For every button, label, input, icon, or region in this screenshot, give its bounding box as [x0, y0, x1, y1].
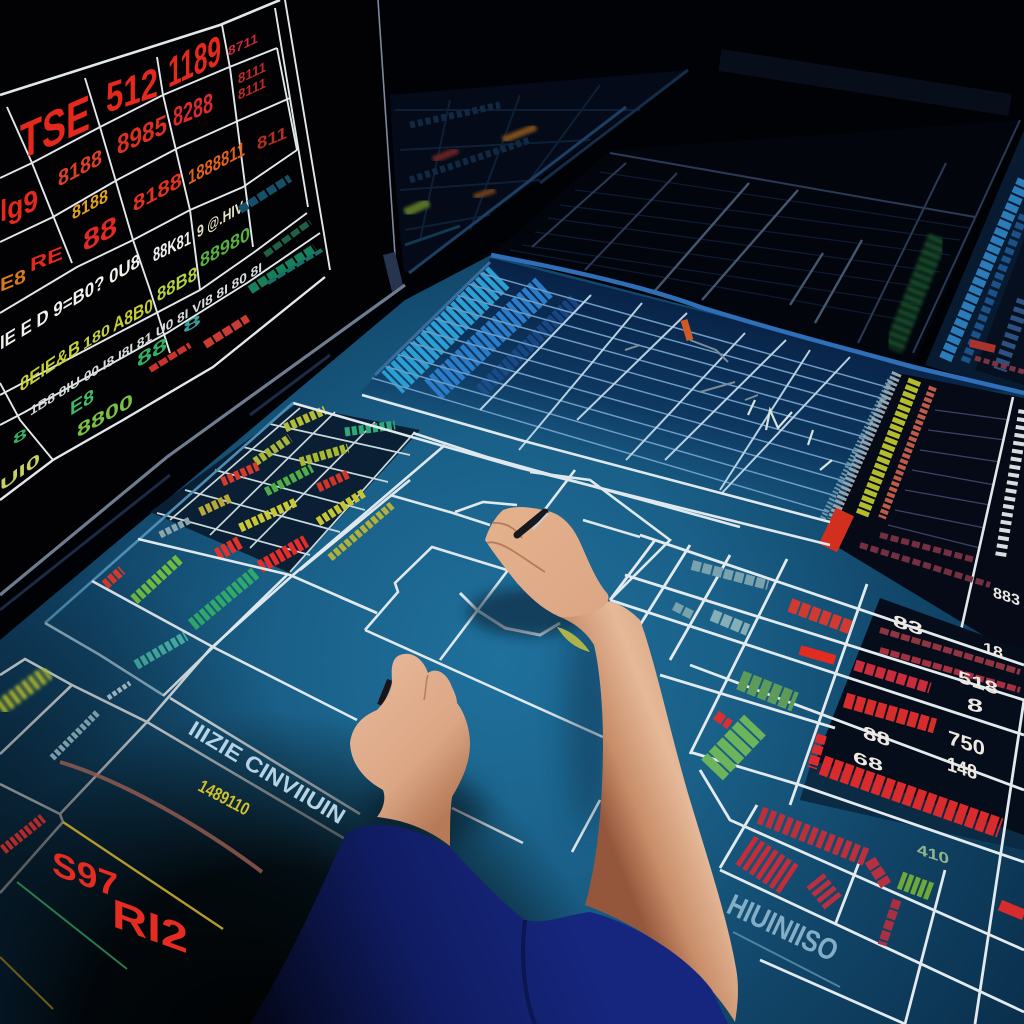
big red readouts: 8111 — [238, 76, 266, 104]
panel: right bottom red data cells: 8 — [967, 694, 983, 717]
shirt — [250, 825, 728, 1024]
panel: lower left labelled cells — [0, 672, 350, 1009]
panel: right bottom red data cells: 88 — [863, 721, 890, 751]
small readouts: 88980 — [200, 222, 250, 273]
small readouts: 8 — [13, 425, 27, 449]
small readouts: 8EIE&B — [20, 335, 80, 397]
label: table caption: IIIZIE CINVIIUIN — [184, 716, 350, 829]
small readouts: A8B0 — [113, 295, 153, 337]
panel: right dark data block with yellow-green stripe — [822, 373, 1024, 660]
big red readouts: TSE — [20, 85, 90, 171]
big red readouts: E8 — [0, 265, 26, 297]
small readouts: 1B8 8IU 00 I8 I8I 81 U0 8I VI8 8I 80 8I — [30, 260, 262, 420]
red figures: RI2 — [112, 890, 188, 962]
trend line — [60, 762, 262, 872]
big red readouts: 8188 — [58, 144, 102, 192]
small readouts: 88 — [137, 333, 167, 373]
panel: right bottom red data cells: HIUINIISO — [722, 888, 843, 968]
panel: right bottom red data cells: 148 — [947, 752, 977, 785]
panel: right bottom red data cells: 18 — [983, 639, 1004, 663]
panel: right bottom red data cells: 750 — [948, 726, 985, 761]
panel: right dark data block with yellow-green stripe: 883 — [993, 584, 1020, 610]
small readouts: 9 @.HIV — [197, 196, 243, 242]
panel: right bottom red data cells: 83 — [893, 610, 923, 640]
monitor — [0, 0, 405, 610]
big red readouts: 8188 — [133, 167, 182, 217]
data table surface — [0, 255, 1024, 1024]
big red readouts: 8188 — [72, 186, 108, 225]
small readouts — [0, 196, 262, 496]
panel: white table grid lines — [0, 395, 830, 893]
panel: right bottom red data cells: 410 — [917, 841, 949, 868]
red figures: S97 — [52, 844, 118, 906]
panel: far upper dark chart grid — [491, 60, 1020, 367]
big red readouts: 8985 — [117, 108, 167, 161]
big red readouts: 88 — [83, 210, 117, 259]
big red readouts: 1888811 — [188, 137, 245, 190]
hand: lower left — [350, 654, 485, 846]
panel: right bottom red data cells — [610, 535, 1024, 1024]
small readouts: 8800 — [77, 389, 133, 443]
small readouts: UI0 — [0, 449, 40, 496]
panel: right bottom red data cells: 518 — [958, 666, 998, 699]
red figures — [52, 844, 188, 962]
big red readouts: 512 — [106, 59, 158, 123]
label: yellow figure: 1489110 — [195, 776, 253, 819]
panel: middle blue grid chart — [360, 255, 1024, 530]
big red readouts: 8288 — [173, 87, 213, 133]
big red readouts: lg9 — [0, 182, 38, 229]
small readouts: 180 — [83, 320, 110, 354]
small readouts: E8 — [70, 385, 94, 421]
big red readouts — [0, 26, 287, 297]
panel: far upper-left dark grid — [390, 70, 688, 273]
big red readouts: 811 — [257, 122, 287, 154]
panel: far right blue and red data column — [925, 130, 1024, 395]
panel: left colored data cells — [105, 405, 420, 665]
small readouts: 88K81 — [153, 227, 191, 267]
big red readouts: 8711 — [228, 30, 258, 59]
monitor grid — [0, 0, 330, 500]
big red readouts: 8111 — [238, 60, 266, 88]
arm and right hand holding pen — [468, 507, 738, 1022]
small readouts: 8 — [183, 311, 201, 338]
small readouts: IE E D 9=B0? 0U8 — [0, 249, 140, 355]
big red readouts: 1189 — [168, 26, 221, 97]
big red readouts: RE — [30, 242, 63, 277]
panel: right bottom red data cells: 68 — [853, 748, 883, 776]
small readouts: 88B8 — [157, 262, 197, 307]
